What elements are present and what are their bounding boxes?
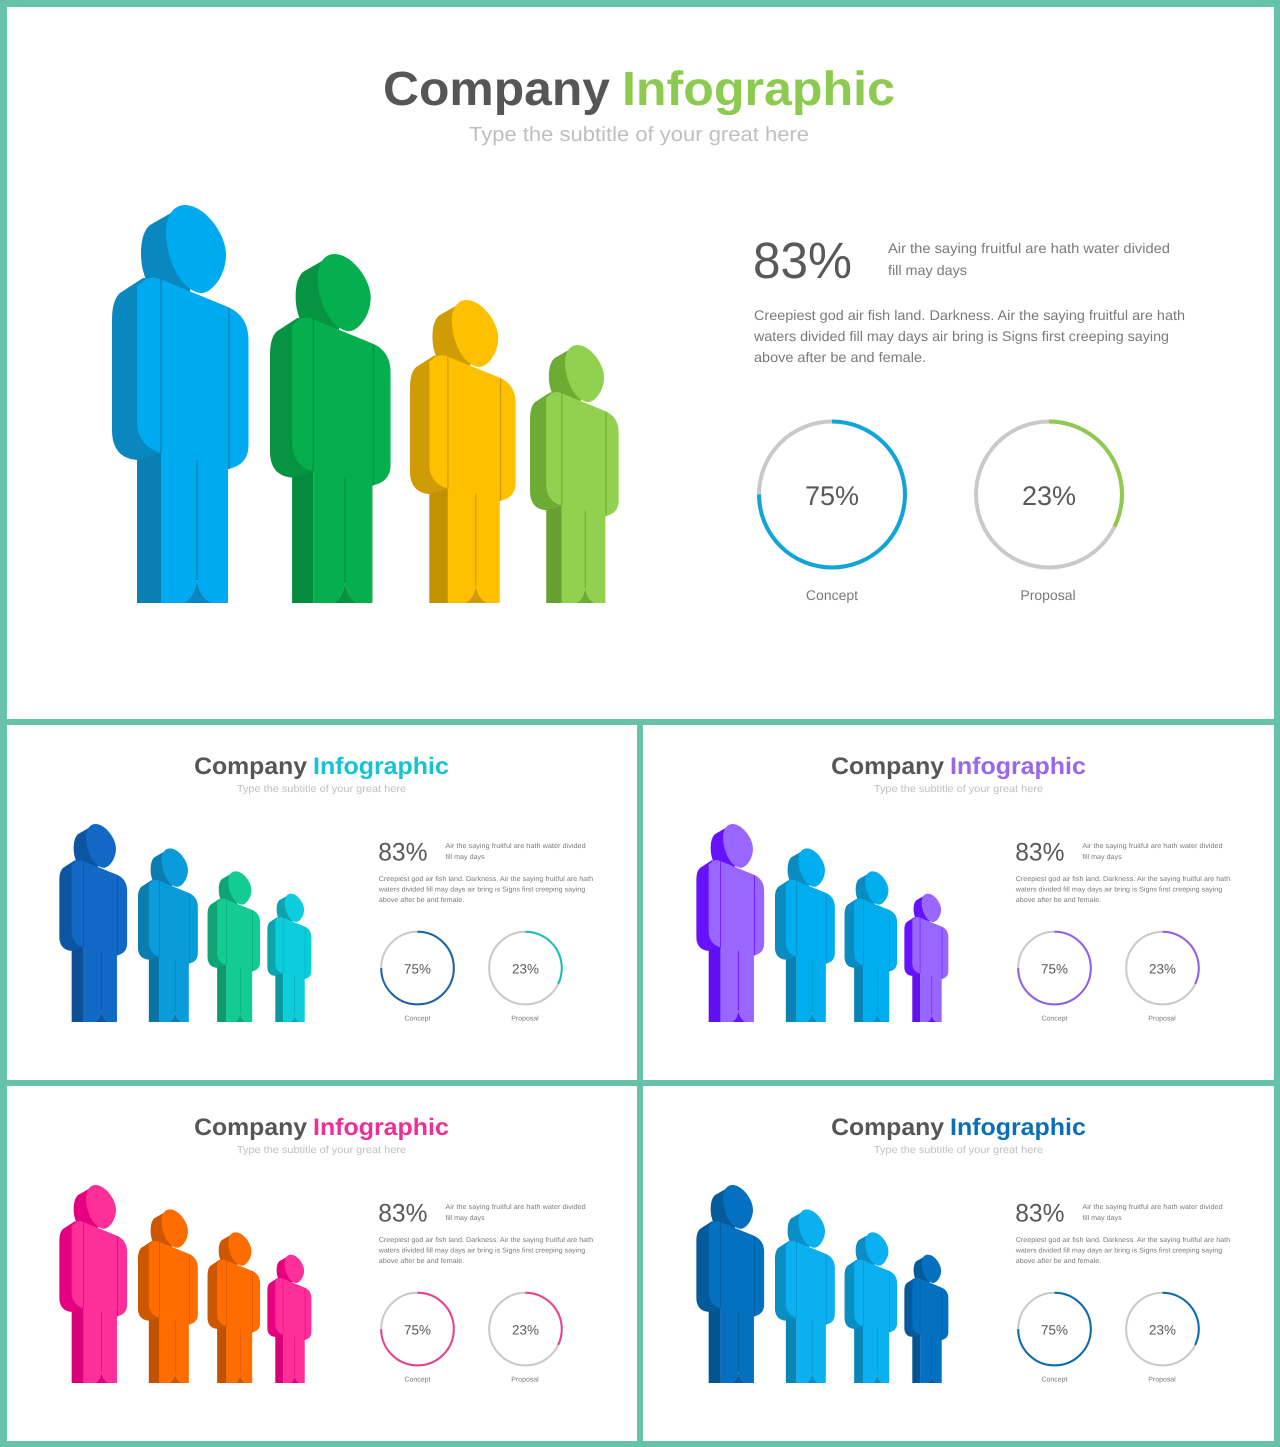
stat caption [1082, 1202, 1223, 1221]
ring: concept 75% [759, 422, 905, 603]
title: Infographic [313, 1114, 449, 1141]
ring: concept 75%: 75% [404, 961, 431, 976]
ring: concept 75%: Concept [1042, 1014, 1068, 1022]
description paragraph: above after be and female. [379, 1257, 464, 1265]
description paragraph: waters divided fill may days air bring is Signs first creeping saying [378, 1246, 585, 1254]
description paragraph: Creepiest god air fish land. Darkness. Air the saying fruitful are hath [379, 875, 593, 883]
ring: concept 75% [1018, 1293, 1091, 1383]
ring: concept 75%: 75% [404, 1322, 431, 1337]
description paragraph: waters divided fill may days air bring is Signs first creeping saying [1015, 1246, 1222, 1254]
ring: concept 75%: Concept [1042, 1375, 1068, 1383]
stat caption [1082, 841, 1223, 860]
stat caption: fill may days [445, 852, 485, 860]
ring: concept 75% [1018, 932, 1091, 1022]
panel: main slide [7, 7, 1274, 719]
big stat: 83% [753, 232, 852, 289]
title: Company [831, 1114, 944, 1141]
stat caption: Air the saying fruitful are hath water divided [888, 240, 1170, 256]
description paragraph [1015, 1236, 1230, 1265]
ring: proposal 23%: 23% [512, 1322, 539, 1337]
description paragraph [1015, 875, 1230, 904]
ring: proposal 23% [1126, 1293, 1199, 1383]
title: Infographic [950, 753, 1086, 780]
figure: dark blue person [696, 1185, 764, 1383]
description paragraph: above after be and female. [754, 349, 926, 365]
figure: blue person [138, 848, 198, 1022]
subtitle: Type the subtitle of your great here [237, 1144, 406, 1156]
ring: proposal 23% [489, 932, 562, 1022]
title [194, 753, 449, 780]
description paragraph: Creepiest god air fish land. Darkness. Air the saying fruitful are hath [379, 1236, 593, 1244]
description paragraph [378, 875, 593, 904]
description paragraph [753, 307, 1185, 365]
title: Infographic [950, 1114, 1086, 1141]
ring: proposal 23% [976, 422, 1122, 603]
ring: proposal 23%: 23% [1022, 481, 1076, 511]
figure: light green person [530, 345, 619, 603]
description paragraph: waters divided fill may days air bring is Signs first creeping saying [378, 885, 585, 893]
ring: proposal 23% [1126, 932, 1199, 1022]
figure: cyan person [267, 894, 311, 1022]
title [831, 1114, 1086, 1141]
big stat: 83% [1015, 837, 1064, 866]
description paragraph: above after be and female. [379, 896, 464, 904]
description paragraph [378, 1236, 593, 1265]
ring: proposal 23%: Proposal [1020, 587, 1076, 603]
big stat: 83% [378, 1198, 427, 1227]
ring: proposal 23%: 23% [512, 961, 539, 976]
title: Infographic [313, 753, 449, 780]
big stat: 83% [1015, 1198, 1064, 1227]
ring: proposal 23%: Proposal [1148, 1375, 1176, 1383]
figure: light blue person [775, 1209, 835, 1383]
ring: proposal 23%: Proposal [511, 1375, 539, 1383]
subtitle: Type the subtitle of your great here [237, 783, 406, 795]
figure: dark blue person [59, 824, 127, 1022]
figure: pink person [267, 1255, 311, 1383]
figure: purple person [904, 894, 948, 1022]
stat caption: Air the saying fruitful are hath water divided [1082, 1202, 1223, 1210]
ring: concept 75% [381, 1293, 454, 1383]
ring: concept 75%: 75% [1041, 1322, 1068, 1337]
ring: proposal 23%: Proposal [1148, 1014, 1176, 1022]
ring: concept 75%: Concept [405, 1375, 431, 1383]
description paragraph: Creepiest god air fish land. Darkness. Air the saying fruitful are hath [1016, 875, 1230, 883]
figure: blue person [775, 848, 835, 1022]
ring: concept 75%: Concept [806, 587, 858, 603]
figure: blue person [112, 205, 248, 603]
description paragraph: above after be and female. [1016, 896, 1101, 904]
description paragraph: waters divided fill may days air bring is Signs first creeping saying [753, 328, 1169, 344]
figure: blue person [845, 871, 897, 1022]
panel: pink variant [7, 1086, 637, 1441]
ring: concept 75%: 75% [1041, 961, 1068, 976]
ring: proposal 23% [489, 1293, 562, 1383]
stat caption: fill may days [1082, 852, 1122, 860]
ring: concept 75%: 75% [805, 481, 859, 511]
subtitle: Type the subtitle of your great here [874, 1144, 1043, 1156]
figure: light blue person [845, 1232, 897, 1383]
figure: purple person [696, 824, 764, 1022]
ring: proposal 23%: 23% [1149, 961, 1176, 976]
figure: orange person [208, 1232, 260, 1383]
ring: concept 75%: Concept [405, 1014, 431, 1022]
title: Infographic [622, 63, 895, 116]
title: Company [831, 753, 944, 780]
figure: dark blue person [904, 1255, 948, 1383]
figure: orange person [138, 1209, 198, 1383]
panel: teal variant [7, 725, 637, 1080]
stat caption [445, 1202, 586, 1221]
stat caption: Air the saying fruitful are hath water divided [445, 1202, 586, 1210]
title [831, 753, 1086, 780]
big stat: 83% [378, 837, 427, 866]
stat caption: Air the saying fruitful are hath water divided [1082, 841, 1223, 849]
title: Company [383, 63, 610, 116]
stat caption: fill may days [445, 1213, 485, 1221]
figure: yellow person [410, 300, 516, 603]
ring: proposal 23%: 23% [1149, 1322, 1176, 1337]
stat caption: Air the saying fruitful are hath water divided [445, 841, 586, 849]
stat caption: fill may days [1082, 1213, 1122, 1221]
figure: green person [208, 871, 260, 1022]
description paragraph: Creepiest god air fish land. Darkness. Air the saying fruitful are hath [754, 307, 1185, 323]
figure: pink person [59, 1185, 127, 1383]
description paragraph: waters divided fill may days air bring is Signs first creeping saying [1015, 885, 1222, 893]
subtitle: Type the subtitle of your great here [874, 783, 1043, 795]
title [194, 1114, 449, 1141]
stat caption: fill may days [888, 262, 967, 278]
ring: proposal 23%: Proposal [511, 1014, 539, 1022]
description paragraph: above after be and female. [1016, 1257, 1101, 1265]
title: Company [194, 1114, 307, 1141]
subtitle: Type the subtitle of your great here [469, 123, 809, 146]
figure: green person [270, 254, 391, 603]
description paragraph: Creepiest god air fish land. Darkness. Air the saying fruitful are hath [1016, 1236, 1230, 1244]
panel: blue variant [643, 1086, 1274, 1441]
title: Company [194, 753, 307, 780]
panel: purple variant [643, 725, 1274, 1080]
ring: concept 75% [381, 932, 454, 1022]
title [383, 63, 895, 116]
stat caption [888, 240, 1170, 278]
stat caption [445, 841, 586, 860]
